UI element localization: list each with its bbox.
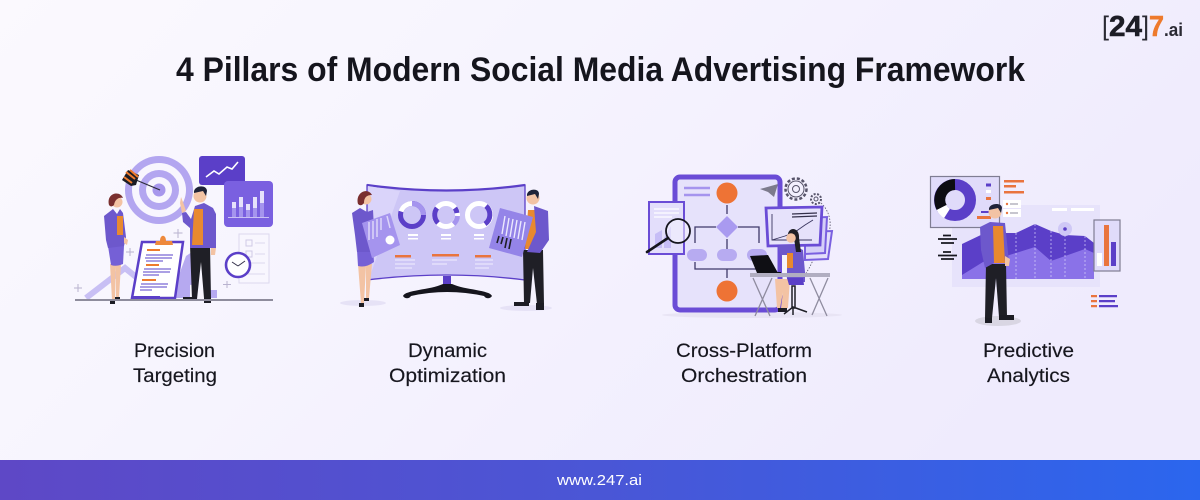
label: cross-platform orchestration: Cross-Platform (676, 341, 812, 362)
label: precision targeting: Targeting (133, 366, 217, 387)
title: 4 Pillars of Modern Social Media Advertising Framework (176, 51, 1025, 89)
label: precision targeting: Precision (134, 341, 215, 362)
label: predictive analytics: Predictive (983, 341, 1074, 362)
label: cross-platform orchestration: Orchestration (681, 366, 807, 387)
donut charts (400, 203, 490, 226)
chart backdrop (952, 205, 1100, 287)
person: woman at desk (775, 229, 807, 315)
donut card (930, 176, 1000, 228)
footer url: www.247.ai (556, 472, 642, 489)
background shapes (86, 252, 217, 298)
tooltips (1003, 200, 1021, 217)
person: woman with tablet (352, 191, 400, 307)
person: man (180, 186, 216, 303)
logo: .ai (1164, 20, 1183, 40)
clipboard (131, 236, 183, 300)
black text lines (938, 236, 957, 259)
logo: 24 (1109, 11, 1142, 43)
bar card (1094, 220, 1120, 271)
person: man (975, 204, 1021, 326)
label: predictive analytics (983, 341, 1074, 387)
sparkles (74, 229, 231, 292)
icon: gears (786, 178, 830, 273)
label: precision targeting (133, 341, 217, 387)
panel: dynamic optimization (340, 185, 552, 387)
floor shadows (340, 300, 552, 311)
logo: [ (1102, 11, 1109, 41)
checklist (239, 234, 269, 283)
logo: 7 (1149, 11, 1164, 43)
panel: precision targeting (74, 156, 273, 387)
logo: ] (1142, 11, 1149, 41)
label: cross-platform orchestration (676, 341, 812, 387)
legend lines (1091, 295, 1118, 307)
desk and laptop (750, 255, 830, 316)
footer band (0, 460, 1200, 500)
orange text bars (1004, 180, 1024, 194)
icon: clock (226, 253, 250, 277)
illustration: flowchart with woman at desk (647, 177, 842, 318)
chart cards (766, 207, 832, 260)
person: man with tablet (489, 190, 549, 310)
card: line chart (199, 156, 245, 185)
flowchart board (675, 177, 780, 310)
illustration: analyst with charts (930, 176, 1120, 326)
ground line (75, 299, 273, 301)
label: dynamic optimization: Dynamic (408, 341, 487, 362)
curved monitor (367, 185, 525, 280)
card: bar chart (224, 181, 273, 227)
illustration: curved screen with two people (340, 185, 552, 311)
monitor stand (403, 276, 492, 298)
area chart (962, 210, 1094, 279)
logo (1102, 11, 1183, 43)
illustration: target with two people (74, 156, 273, 304)
ground (662, 312, 842, 318)
label: predictive analytics: Analytics (987, 366, 1070, 387)
person: woman (104, 194, 128, 304)
screen bars and text (395, 234, 493, 268)
document with magnifier (647, 202, 690, 254)
icon: target (122, 156, 193, 224)
paper plane (760, 184, 778, 197)
panel: cross-platform orchestration (647, 177, 842, 387)
panel: predictive analytics (930, 176, 1120, 387)
label: dynamic optimization (389, 341, 506, 387)
label: dynamic optimization: Optimization (389, 366, 506, 387)
